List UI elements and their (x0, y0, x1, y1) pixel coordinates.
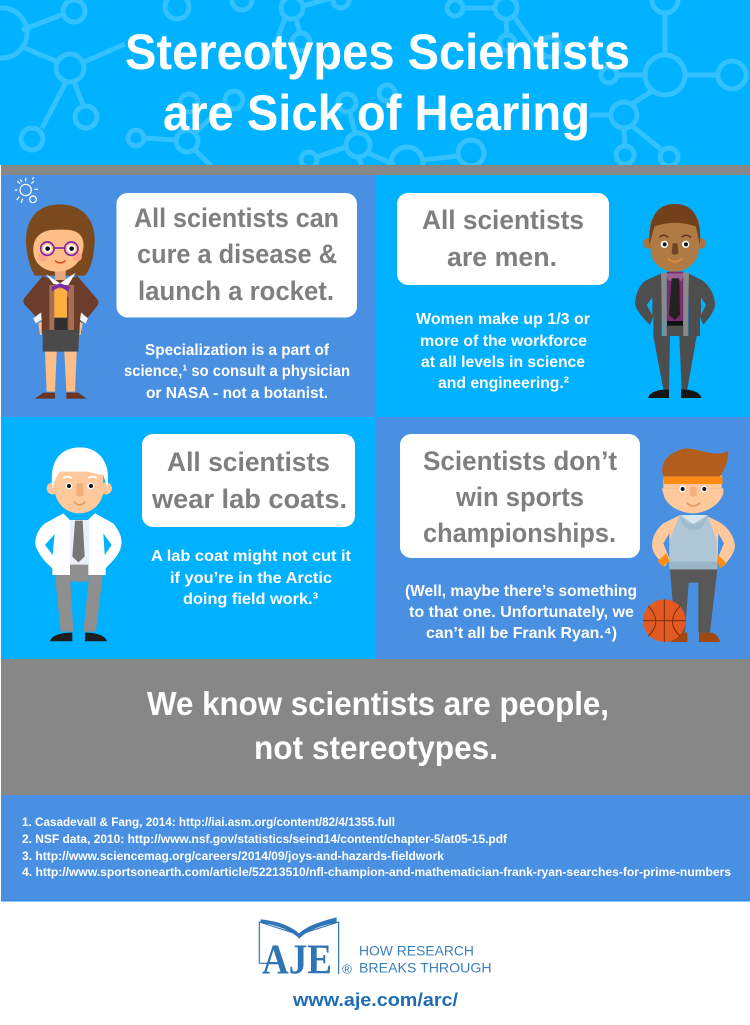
AJE logo (259, 917, 492, 983)
reference list: 4. http://www.sportsonearth.com/article/52213510/nfl-champion-and-mathematician-frank-ryan-searches-for-prime-numbers (22, 865, 731, 879)
panel: all scientists can cure a disease (1, 175, 376, 417)
character: woman scientist (23, 204, 99, 399)
conclusion text (147, 685, 609, 766)
tagline: BREAKS THROUGH (359, 961, 492, 976)
response text: doing field work.³ (183, 591, 318, 608)
stereotype text (134, 203, 339, 306)
tagline (359, 944, 492, 976)
conclusion band (1, 659, 750, 795)
stereotype text: wear lab coats. (151, 484, 347, 514)
gray divider band (1, 165, 750, 175)
response text: at all levels in science (421, 354, 585, 371)
response text: can’t all be Frank Ryan.⁴) (426, 625, 617, 642)
title (125, 24, 630, 141)
reference list: 3. http://www.sciencemag.org/careers/2014/09/joys-and-hazards-fieldwork (22, 849, 444, 863)
panel: all scientists wear lab coats (1, 417, 376, 659)
character: man in suit (635, 204, 715, 398)
stereotype text: All scientists can (134, 203, 339, 233)
response text (124, 342, 350, 402)
title: are Sick of Hearing (163, 85, 590, 141)
reference list: 2. NSF data, 2010: http://www.nsf.gov/statistics/seind14/content/chapter-5/at05-15.pdf (22, 832, 508, 846)
conclusion text: not stereotypes. (254, 729, 498, 766)
registered mark: ® (342, 961, 352, 976)
response text (151, 548, 352, 608)
reference list: 1. Casadevall & Fang, 2014: http://iai.asm.org/content/82/4/1355.full (22, 815, 395, 829)
speech box (116, 193, 357, 318)
response text: if you’re in the Arctic (170, 570, 332, 587)
stereotype text: All scientists (422, 205, 584, 235)
response text (416, 311, 590, 392)
stereotype text: championships. (423, 518, 616, 548)
header banner (0, 0, 750, 179)
icon: basketball (643, 599, 686, 642)
panel: all scientists are men (376, 175, 750, 417)
references panel (1, 795, 750, 902)
response text (405, 583, 637, 642)
reference list (22, 815, 731, 879)
panel: scientists don't win sports championships (376, 417, 750, 659)
response text: or NASA - not a botanist. (146, 385, 328, 402)
website url: www.aje.com/arc/ (292, 990, 458, 1010)
stereotype text: cure a disease & (137, 239, 337, 269)
stereotype text (151, 447, 347, 514)
response text: and engineering.² (438, 375, 569, 392)
character: man in lab coat (35, 447, 122, 641)
response text: science,¹ so consult a physician (124, 363, 350, 380)
response text: Specialization is a part of (145, 342, 330, 359)
character: athlete with basketball (643, 448, 735, 642)
speech box (397, 193, 609, 285)
speech box (400, 434, 640, 558)
stereotype text: Scientists don’t (423, 446, 617, 476)
response text: Women make up 1/3 or (416, 311, 590, 328)
stereotype text: are men. (447, 242, 557, 272)
logo letters: AJE (262, 937, 332, 983)
response text: to that one. Unfortunately, we (409, 604, 634, 621)
stereotype text (422, 205, 584, 272)
stereotype text (423, 446, 617, 548)
speech box (142, 434, 355, 527)
response text: more of the workforce (420, 333, 587, 350)
response text: A lab coat might not cut it (151, 548, 352, 565)
conclusion text: We know scientists are people, (147, 685, 609, 722)
molecule network background (0, 0, 746, 179)
stereotype text: launch a rocket. (138, 276, 334, 306)
stereotype text: win sports (455, 482, 584, 512)
title: Stereotypes Scientists (125, 24, 630, 80)
stereotype text: All scientists (167, 447, 330, 477)
icon: open book (259, 917, 339, 974)
tagline: HOW RESEARCH (359, 944, 474, 959)
response text: (Well, maybe there’s something (405, 583, 637, 600)
icon: light bulb (15, 177, 38, 203)
